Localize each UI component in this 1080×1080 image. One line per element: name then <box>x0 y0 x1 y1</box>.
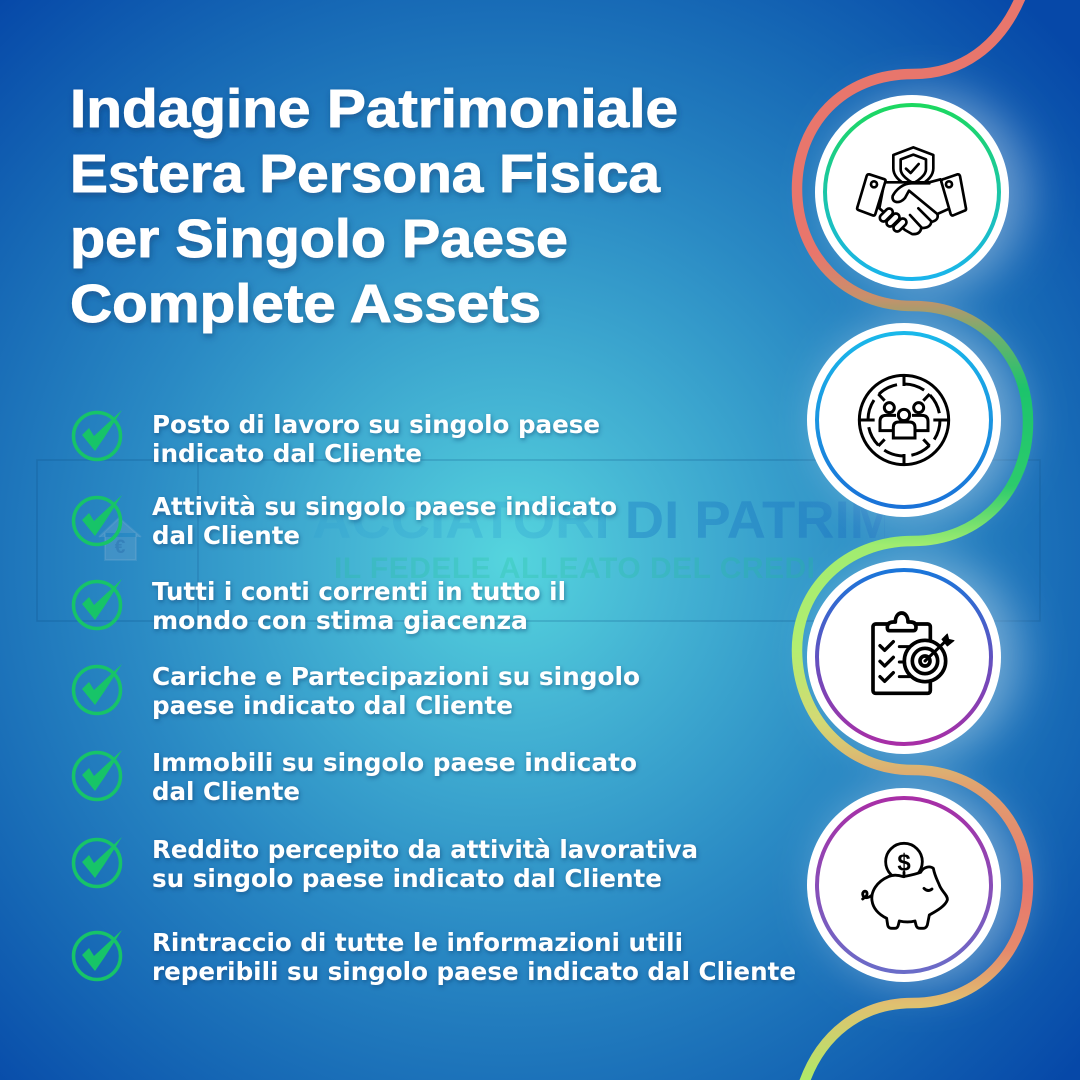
wavy connector line <box>797 0 1028 1080</box>
list item 2 <box>152 492 617 550</box>
badge 1: handshake <box>815 95 1009 289</box>
icon: check 1 <box>74 410 122 460</box>
list item 7: reperibili su singolo paese indicato dal Cliente <box>152 957 796 986</box>
circle glows <box>820 92 1028 985</box>
title: Complete Assets <box>70 274 541 334</box>
list item 5 <box>152 748 637 806</box>
title: Estera Persona Fisica <box>70 144 661 204</box>
list item 7: Rintraccio di tutte le informazioni utili <box>152 928 683 957</box>
icon: check 6 <box>74 837 122 886</box>
list item 1 <box>152 410 600 468</box>
icon: check 7 <box>74 930 122 980</box>
badge 4: piggy bank <box>807 788 1001 982</box>
icon: check 4 <box>74 664 122 714</box>
list item 4: paese indicato dal Cliente <box>152 691 513 720</box>
list item 3 <box>152 577 566 635</box>
list item 2: Attività su singolo paese indicato <box>152 492 617 521</box>
list item 5: Immobili su singolo paese indicato <box>152 748 637 777</box>
title: Indagine Patrimoniale <box>70 79 678 139</box>
icon: handshake with shield <box>857 147 966 234</box>
icon: check 2 <box>74 495 122 544</box>
list item 4: Cariche e Partecipazioni su singolo <box>152 662 640 691</box>
list item 1: Posto di lavoro su singolo paese <box>152 410 600 439</box>
list item 2: dal Cliente <box>152 521 300 550</box>
list item 1: indicato dal Cliente <box>152 439 422 468</box>
list item 6 <box>152 835 698 893</box>
list item 3: mondo con stima giacenza <box>152 606 528 635</box>
watermark logo <box>37 460 1040 621</box>
list item 7 <box>152 928 796 986</box>
title: per Singolo Paese <box>70 209 568 269</box>
list item 4 <box>152 662 640 720</box>
list item 5: dal Cliente <box>152 777 300 806</box>
badge 3: checklist and target <box>807 560 1001 754</box>
list item 6: su singolo paese indicato dal Cliente <box>152 864 662 893</box>
icon: piggy bank with coin <box>863 843 947 928</box>
list item 6: Reddito percepito da attività lavorativa <box>152 835 698 864</box>
title <box>70 79 678 334</box>
icon: clipboard with target <box>873 613 954 693</box>
watermark logo: ACCIATORI DI PATRIMONI <box>312 491 992 550</box>
list item 3: Tutti i conti correnti in tutto il <box>152 577 566 606</box>
icon: piggy bank with coin: $ <box>897 849 911 876</box>
watermark logo: IL FEDELE ALLEATO DEL CREDI <box>334 552 815 585</box>
icon: check 3 <box>74 579 122 628</box>
icon: people in target <box>859 375 949 465</box>
badge 2: target group <box>807 323 1001 517</box>
icon: check 5 <box>74 750 122 800</box>
watermark logo: € <box>115 537 126 558</box>
